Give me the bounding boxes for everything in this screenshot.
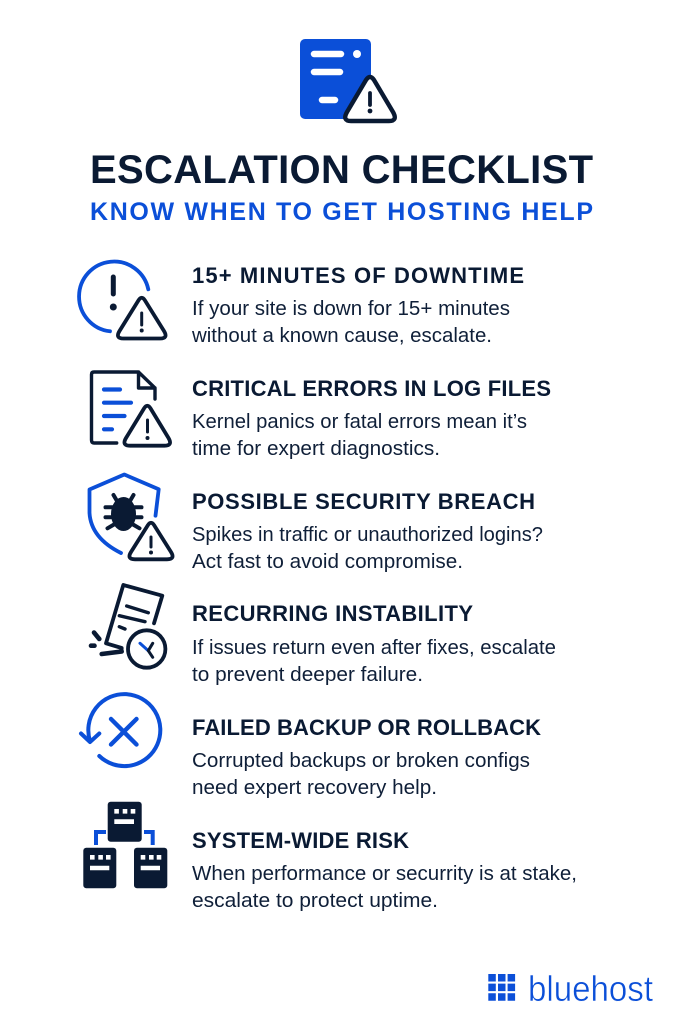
text block: to prevent deeper failure. xyxy=(192,664,423,686)
heading: FAILED BACKUP OR ROLLBACK xyxy=(192,715,541,740)
text block xyxy=(192,524,543,573)
text block: time for expert diagnostics. xyxy=(192,438,440,460)
text block: Spikes in traffic or unauthorized logins? xyxy=(192,524,543,546)
text block xyxy=(191,298,510,347)
text block xyxy=(192,750,530,799)
logo: bluehost: bluehost xyxy=(528,968,653,1009)
title: ESCALATION CHECKLIST xyxy=(90,148,593,192)
text block: When performance or securrity is at stake, xyxy=(192,863,577,885)
icon: server document with warning xyxy=(300,39,395,121)
subtitle: KNOW WHEN TO GET HOSTING HELP xyxy=(90,198,593,226)
text block: without a known cause, escalate. xyxy=(191,325,492,347)
text block: If your site is down for 15+ minutes xyxy=(192,298,510,320)
text block: If issues return even after fixes, escalate xyxy=(192,637,556,659)
text block: Corrupted backups or broken configs xyxy=(192,750,530,772)
text block xyxy=(192,863,577,912)
panel: recurring instability xyxy=(91,585,556,686)
heading: RECURRING INSTABILITY xyxy=(192,601,473,626)
heading: CRITICAL ERRORS IN LOG FILES xyxy=(192,376,551,401)
panel: 15+ minutes of downtime xyxy=(79,262,524,347)
heading: SYSTEM-WIDE RISK xyxy=(192,828,409,853)
text block: Act fast to avoid compromise. xyxy=(192,551,463,573)
panel: failed backup or rollback xyxy=(81,694,541,799)
text block: escalate to protect uptime. xyxy=(192,890,438,912)
icon: alert clock with warning xyxy=(79,262,166,338)
text block xyxy=(192,411,527,460)
panel: critical errors in log files xyxy=(92,372,551,460)
icon: fallen document with clock xyxy=(91,585,165,668)
text block xyxy=(192,637,556,686)
panel: possible security breach xyxy=(90,474,543,573)
text block: Kernel panics or fatal errors mean it’s xyxy=(192,411,527,433)
icon: connected servers xyxy=(83,802,167,888)
panel: system-wide risk xyxy=(83,802,577,912)
heading: POSSIBLE SECURITY BREACH xyxy=(192,489,535,514)
icon: rollback arrow with X xyxy=(81,694,160,766)
heading: 15+ MINUTES OF DOWNTIME xyxy=(192,263,524,288)
icon: log file with warning xyxy=(92,372,170,446)
icon: shield with bug and warning xyxy=(90,474,173,559)
text block: need expert recovery help. xyxy=(192,777,437,799)
